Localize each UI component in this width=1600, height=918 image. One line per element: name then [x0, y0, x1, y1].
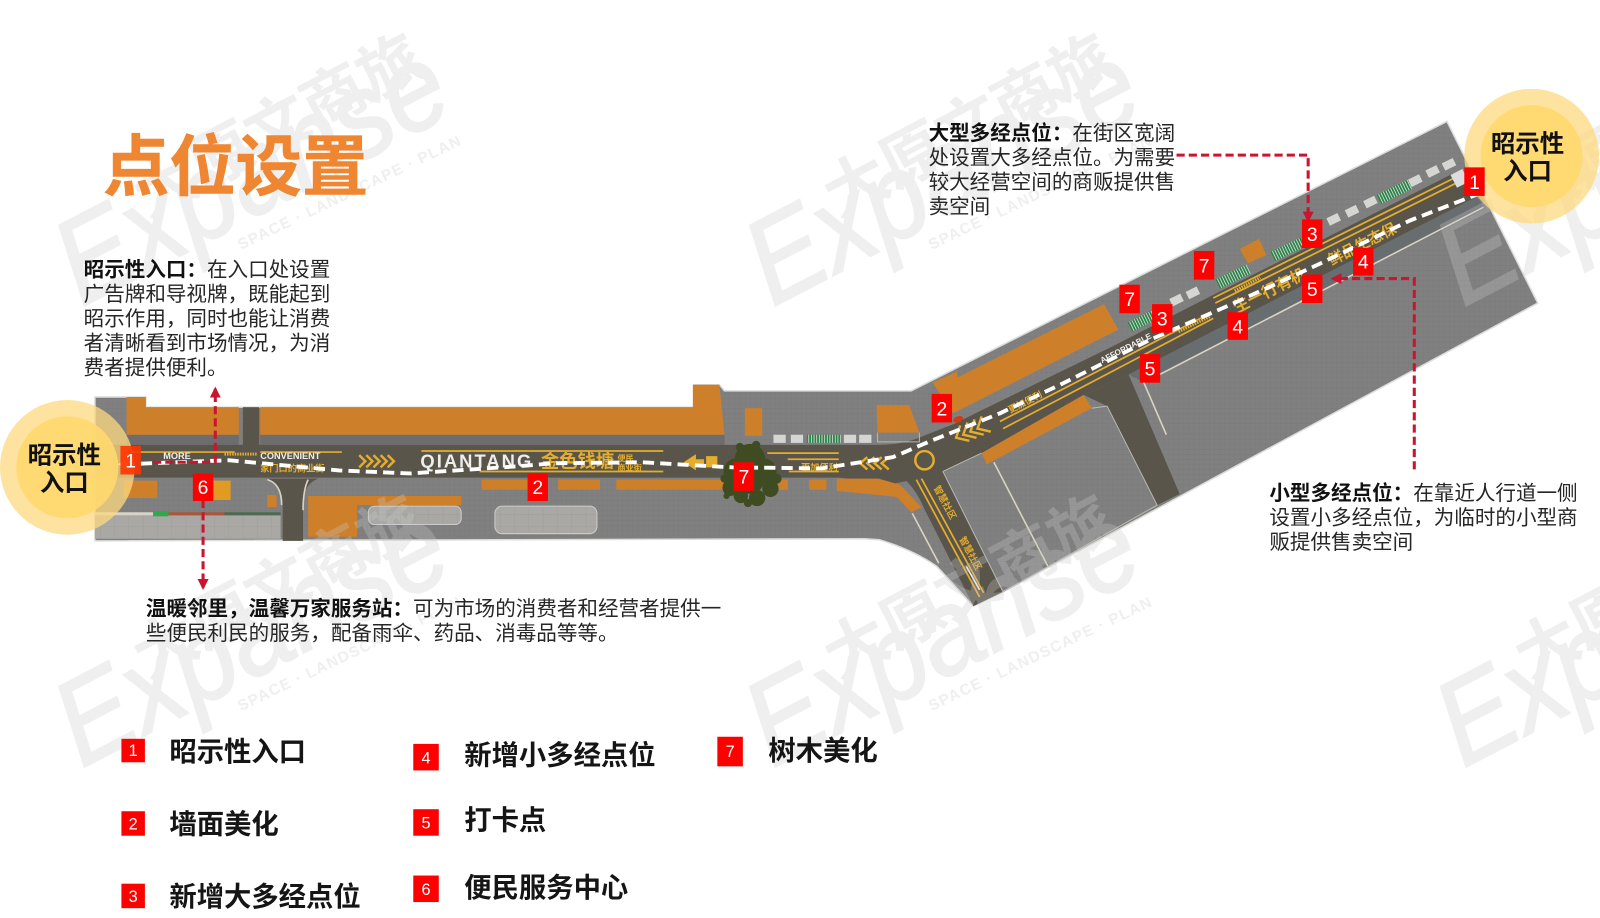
text block: illuminated entrance: 者清晰看到市场情况，为消 — [84, 332, 330, 355]
roads — [95, 173, 1477, 606]
legend item 5: 5 — [421, 815, 431, 833]
road lettering: 便民 — [617, 453, 634, 463]
road markings — [131, 179, 1455, 597]
road lettering: 更加便利 — [801, 461, 838, 472]
legend item 3: 新增大多经点位 — [169, 881, 361, 912]
road lettering: 鲜品生态保 — [1325, 219, 1399, 269]
entrance circle: east — [1464, 89, 1599, 223]
road lettering: 更加便利 — [1006, 389, 1044, 415]
entrance circle: east: 昭示性 — [1491, 130, 1564, 158]
text block: service station: 些便民利民的服务，配备雨伞、药品、消毒品等等。 — [146, 622, 619, 645]
map number badges: 3 — [1307, 224, 1318, 246]
road lettering: QIANTANG — [420, 450, 533, 471]
road lettering: CONVENIENT — [260, 451, 321, 461]
red car — [952, 415, 964, 424]
legend item 7: 7 — [726, 743, 735, 761]
watermarks: Expanse — [722, 15, 1160, 330]
watermarks: 大原文商旅 — [813, 484, 1125, 693]
text block: large stall points: 卖空间 — [929, 195, 990, 218]
legend item 4: 4 — [421, 749, 431, 767]
road lettering — [163, 219, 1399, 590]
chevrons: junction — [956, 416, 991, 441]
yellow arrow marking — [684, 454, 717, 470]
text block: small stall points: 贩提供售卖空间 — [1269, 531, 1413, 554]
map number badges: 6 — [198, 477, 208, 499]
entrance circle: west: 昭示性 — [28, 441, 101, 469]
text block: illuminated entrance: 昭示作用，同时也能让消费 — [84, 308, 330, 331]
legend item 5: 打卡点 — [464, 805, 546, 836]
text block: large stall points: 大型多经点位：在街区宽阔 — [929, 122, 1175, 145]
map number badges: 5 — [1307, 279, 1318, 301]
map number badges: 7 — [1124, 289, 1135, 311]
watermarks: SPACE · LANDSCAPE · PLAN — [926, 133, 1154, 254]
legend item 2: 墙面美化 — [169, 809, 279, 840]
sidewalk lines — [267, 207, 1484, 566]
orange buildings — [123, 239, 1266, 537]
legend item 6: 6 — [421, 881, 431, 899]
chevrons: road west — [860, 457, 889, 469]
road lettering: 商业街 — [617, 462, 642, 472]
tree — [720, 441, 782, 507]
callout arrow: service station — [202, 500, 205, 588]
entrance circle: west: 入口 — [40, 470, 89, 497]
watermarks: Expanse — [722, 476, 1160, 791]
legend item 1: 1 — [129, 742, 138, 760]
legend item 5 — [413, 805, 546, 836]
route arrow: east end — [1482, 184, 1496, 196]
legend item 4: 新增小多经点位 — [464, 739, 656, 770]
road lettering: 智慧社区 — [957, 535, 984, 572]
map number badges: 1 — [1469, 172, 1480, 194]
legend item 2 — [121, 809, 279, 840]
legend item 7: 树木美化 — [768, 735, 878, 766]
text block: service station: 温暖邻里，温馨万家服务站：可为市场的消费者和经营者提供一 — [146, 597, 721, 620]
chevrons: road east — [359, 455, 394, 467]
map number badges: 2 — [936, 398, 947, 420]
watermarks: Expanse — [31, 15, 469, 330]
road lettering: 家门口的商业街 — [260, 462, 324, 473]
watermarks: SPACE · LANDSCAPE · PLAN — [235, 594, 464, 715]
legend item 3: 3 — [129, 888, 138, 906]
callout arrow: large stall — [1177, 155, 1308, 220]
road lettering: AFFORDABLE — [1099, 331, 1154, 365]
paved plazas — [95, 435, 724, 539]
text block: small stall points: 小型多经点位：在靠近人行道一侧 — [1269, 482, 1578, 505]
map number badges: 4 — [1232, 317, 1243, 339]
text block: illuminated entrance: 昭示性入口：在入口处设置 — [84, 259, 330, 282]
map number badges: 2 — [532, 477, 543, 499]
map number badges — [120, 167, 1485, 501]
road lettering: MORE — [163, 451, 191, 461]
map number badges: 4 — [1358, 251, 1369, 273]
text block: large stall points: 较大经营空间的商贩提供售 — [929, 171, 1175, 194]
map number badges: 7 — [1199, 255, 1209, 277]
map number badges: 3 — [1157, 309, 1168, 331]
watermarks: 大原文商旅 — [122, 22, 434, 232]
legend item 6: 便民服务中心 — [464, 872, 628, 903]
street plan map — [95, 121, 1538, 606]
crosswalk tiles and planters — [773, 158, 1456, 443]
road lettering: 智慧社区 — [932, 484, 959, 521]
road lettering: 金色钱塘 — [541, 450, 614, 471]
entrance circle: east: 入口 — [1503, 159, 1552, 186]
route arrow: west end — [117, 458, 130, 470]
watermarks: 大原文商旅 — [813, 22, 1125, 232]
ground — [95, 121, 1538, 606]
text block: large stall points: 处设置大多经点位。为需要 — [929, 146, 1175, 169]
legend item 1: 昭示性入口 — [169, 736, 306, 767]
text block: small stall points: 设置小多经点位，为临时的小型商 — [1269, 507, 1578, 530]
legend item 7 — [717, 735, 878, 766]
watermarks: SPACE · LANDSCAPE · PLAN — [926, 594, 1154, 715]
callout arrow: entrance text — [153, 389, 215, 462]
legend — [121, 735, 878, 912]
map number badges: 7 — [738, 467, 749, 489]
route dashed line — [123, 192, 1484, 473]
callout arrow: small stall — [1333, 279, 1414, 469]
parking strip along diagonal road — [1129, 197, 1486, 382]
text block: illuminated entrance: 广告牌和导视牌，既能起到 — [84, 283, 330, 306]
text block: illuminated entrance: 费者提供便利。 — [84, 357, 228, 380]
road lettering: 生一行有机 — [1230, 265, 1309, 317]
watermarks: 大原文商旅 — [122, 484, 434, 693]
zebra crossing east end — [1450, 169, 1469, 188]
map number badges: 1 — [125, 450, 136, 472]
legend item 2: 2 — [129, 816, 138, 834]
watermarks: SPACE · LANDSCAPE · PLAN — [235, 133, 464, 254]
watermarks: Expanse — [31, 476, 469, 791]
entrance circle: west — [0, 400, 135, 535]
title: 点位设置 — [103, 131, 368, 205]
map number badges: 5 — [1145, 359, 1155, 381]
